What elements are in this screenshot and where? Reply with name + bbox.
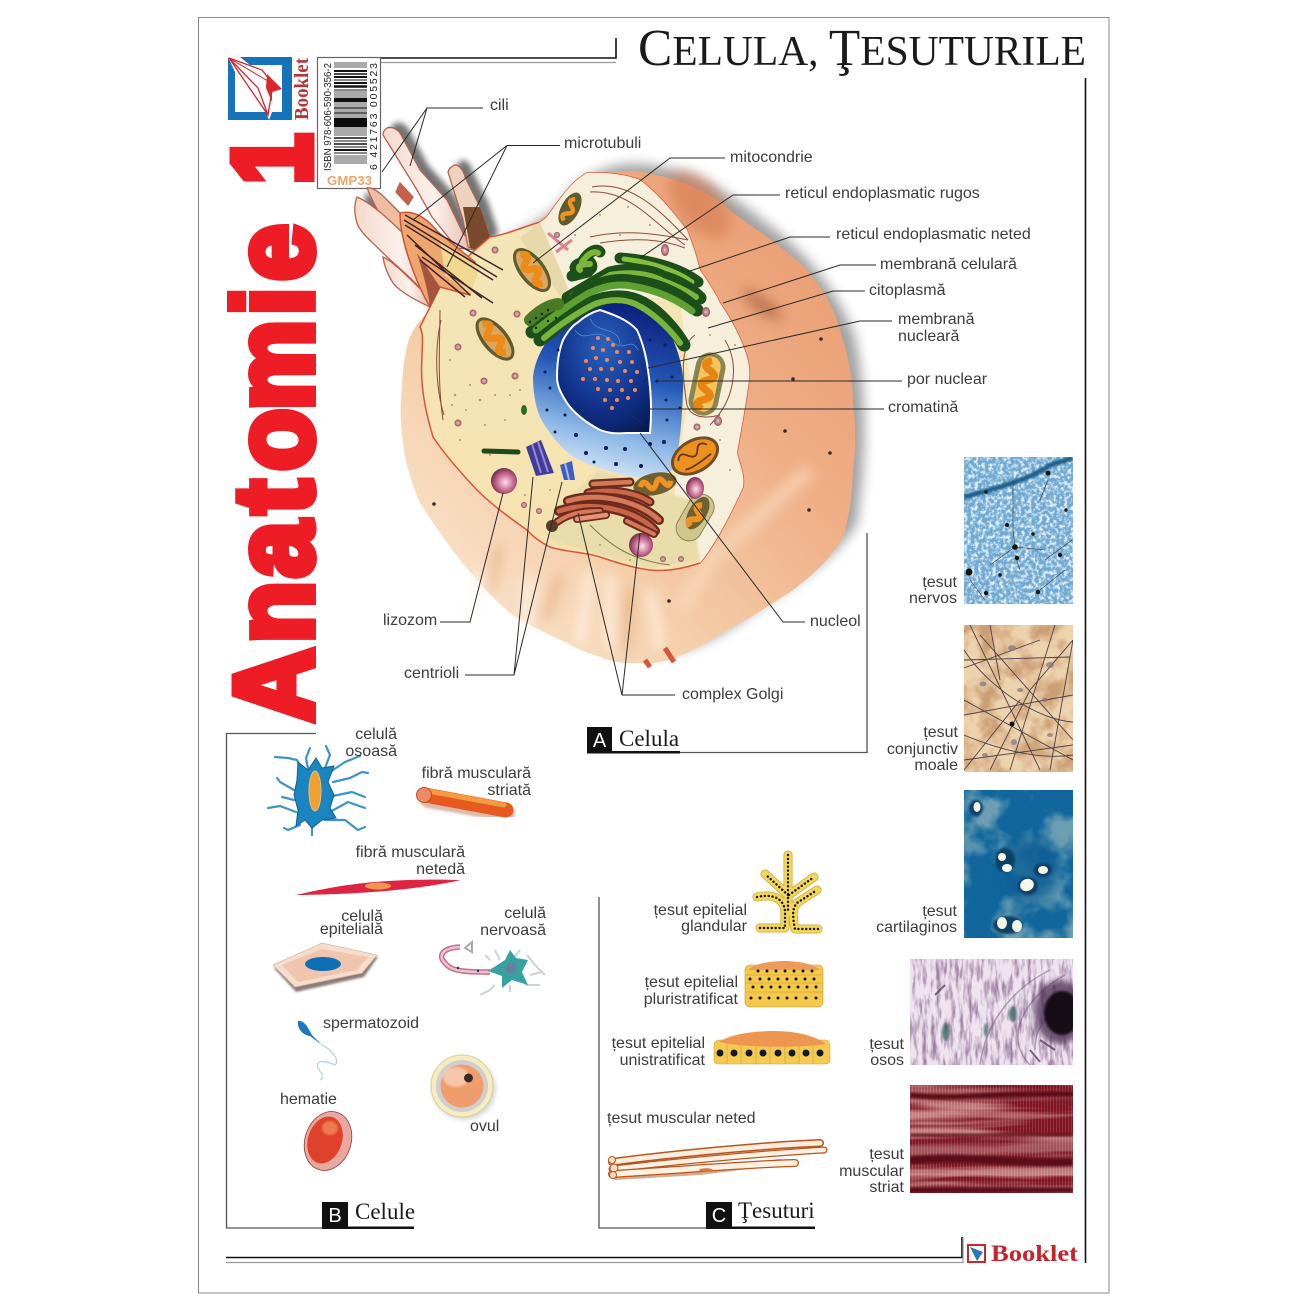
cell labels: nucleol [810,613,861,630]
vertical heading Anatomie: Anatomie [211,224,336,722]
cell labels: lizozom [383,612,437,629]
cell labels: centrioli [404,665,459,682]
cell body [401,171,855,663]
cell type labels: celulă [504,905,546,922]
section label B [322,1199,415,1229]
cell type labels: nervoasă [480,922,546,939]
icon: simple epithelium [714,1031,830,1064]
leader lines [382,108,902,695]
publisher logo bottom: Booklet [991,1241,1078,1266]
tissue labels: țesut epitelial [612,1035,705,1052]
cytoplasm [420,173,749,571]
mitochondria [468,189,728,546]
icon: bone cell [268,746,368,835]
micrograph labels: conjunctiv [887,741,958,758]
page frame [198,18,1109,1293]
publisher logo bottom [968,1241,1078,1266]
micrograph labels: țesut [922,574,958,591]
chromatin [565,318,645,425]
cell labels [383,97,1031,703]
rough endoplasmic reticulum [530,250,700,345]
membrane shading and folds [470,160,810,650]
cell type labels: netedă [416,861,465,878]
cell type labels [280,726,546,1135]
tissue labels: țesut epitelial [654,902,747,919]
cell labels: citoplasmă [869,282,946,299]
publisher logo [228,57,313,120]
icon: smooth fibre [296,880,461,895]
micrograph labels [839,574,959,1196]
cell type labels: celulă [355,726,397,743]
micrograph labels: țesut [869,1146,905,1163]
title: CELULA, ŢESUTURILE [638,20,1086,77]
micrograph labels: cartilaginos [876,919,957,936]
barcode box: ISBN 978-606-590-356-2 [323,63,334,171]
ER dots [529,309,557,329]
stubs at cell base [645,648,674,667]
cell type labels: fibră musculară [422,765,531,782]
section label B: B [328,1205,342,1227]
icon: sperm [298,1021,337,1080]
cell labels: reticul endoplasmatic neted [836,226,1031,243]
barcode box: GMP33 [327,173,372,188]
cell labels: reticul endoplasmatic rugos [785,185,980,202]
publisher logo: Booklet [291,58,313,120]
panel: cell illustration [355,122,864,667]
tissue labels [607,902,756,1127]
cell labels: membrană [898,311,975,328]
micrograph labels: muscular [839,1163,905,1180]
cell type labels: osoasă [345,743,397,760]
nuclear pores [544,338,682,468]
section label C: C [712,1205,726,1227]
icon: red blood cell [297,1105,359,1177]
section label B: Celule [355,1199,415,1224]
tissue labels: pluristratificat [644,991,739,1008]
cilia shadow [365,122,498,295]
icon: stratified epithelium [745,961,823,1007]
section label C [706,1198,815,1229]
microtubules [404,215,503,303]
frame rules [226,38,1086,1263]
icon: glandular epithelium [757,855,818,929]
tissue labels: țesut muscular neted [607,1110,756,1127]
panel: cell types [268,726,546,1177]
wedge band [520,222,568,296]
cell labels: nucleară [898,328,959,345]
micrograph labels: osos [870,1052,904,1069]
tissue labels: unistratificat [620,1052,706,1069]
pale cytoplasm region [540,173,749,563]
micrograph: striated muscle [905,1085,1078,1195]
micrograph labels: nervos [909,590,957,607]
tissue labels: țesut epitelial [645,974,738,991]
micrograph labels: striat [869,1179,905,1196]
dark golgi vesicle [546,520,558,532]
cilia [355,127,490,307]
barcode box [318,58,380,188]
micrograph: soft connective tissue [964,625,1073,772]
cell labels: cili [490,97,509,114]
nuclear section [557,310,651,433]
barcode box: 6 421763 005523 [368,63,380,170]
nucleus [533,303,683,477]
section label A: A [593,730,607,752]
cell labels: cromatină [888,399,958,416]
cell labels: por nuclear [907,371,988,388]
icon: striated fibre [416,788,507,814]
nucleolus granules [581,336,639,410]
cell type labels: spermatozoid [323,1015,419,1032]
lower cytoplasm shade [550,470,700,568]
tissue labels: glandular [681,918,748,935]
panel: tissue micrographs [839,457,1086,1196]
icon: ovum [431,1055,495,1119]
icon: smooth muscle tissue [608,1143,824,1178]
lysosomes [454,232,722,562]
section label C: Ţesuturi [738,1198,815,1223]
cell surface pores [432,337,832,603]
panel: epithelial and smooth tissue [607,855,830,1178]
cell labels: microtubuli [564,135,641,152]
orange microtubule patch [400,212,475,307]
section label A: Celula [619,726,679,751]
endoplasmic filaments [437,186,733,565]
cell drop shadow [446,164,864,656]
cell labels: mitocondrie [730,149,813,166]
centrioles [484,405,575,480]
cell type labels: hematie [280,1091,337,1108]
micrograph labels: moale [914,757,958,774]
cell type labels: ovul [470,1118,499,1135]
micrograph: nervous tissue [964,457,1073,604]
cell labels: membrană celulară [880,256,1017,273]
micrograph labels: țesut [869,1036,905,1053]
micrograph labels: țesut [922,903,958,920]
cytoplasm stipple [449,206,736,561]
cell type labels: fibră musculară [356,844,465,861]
golgi complex [557,482,659,534]
icon: nerve cell [442,942,545,995]
cell type labels: striată [487,782,531,799]
micrograph labels: țesut [923,724,959,741]
cell type labels: celulă [341,908,383,925]
icon: epithelial cell [273,943,378,992]
cell labels: complex Golgi [682,686,783,703]
micrograph: bone [910,959,1086,1065]
micrograph: cartilage [964,790,1073,938]
number 1: 1 [212,134,334,184]
cell type labels: epitelială [320,921,383,938]
section label A [587,726,680,754]
